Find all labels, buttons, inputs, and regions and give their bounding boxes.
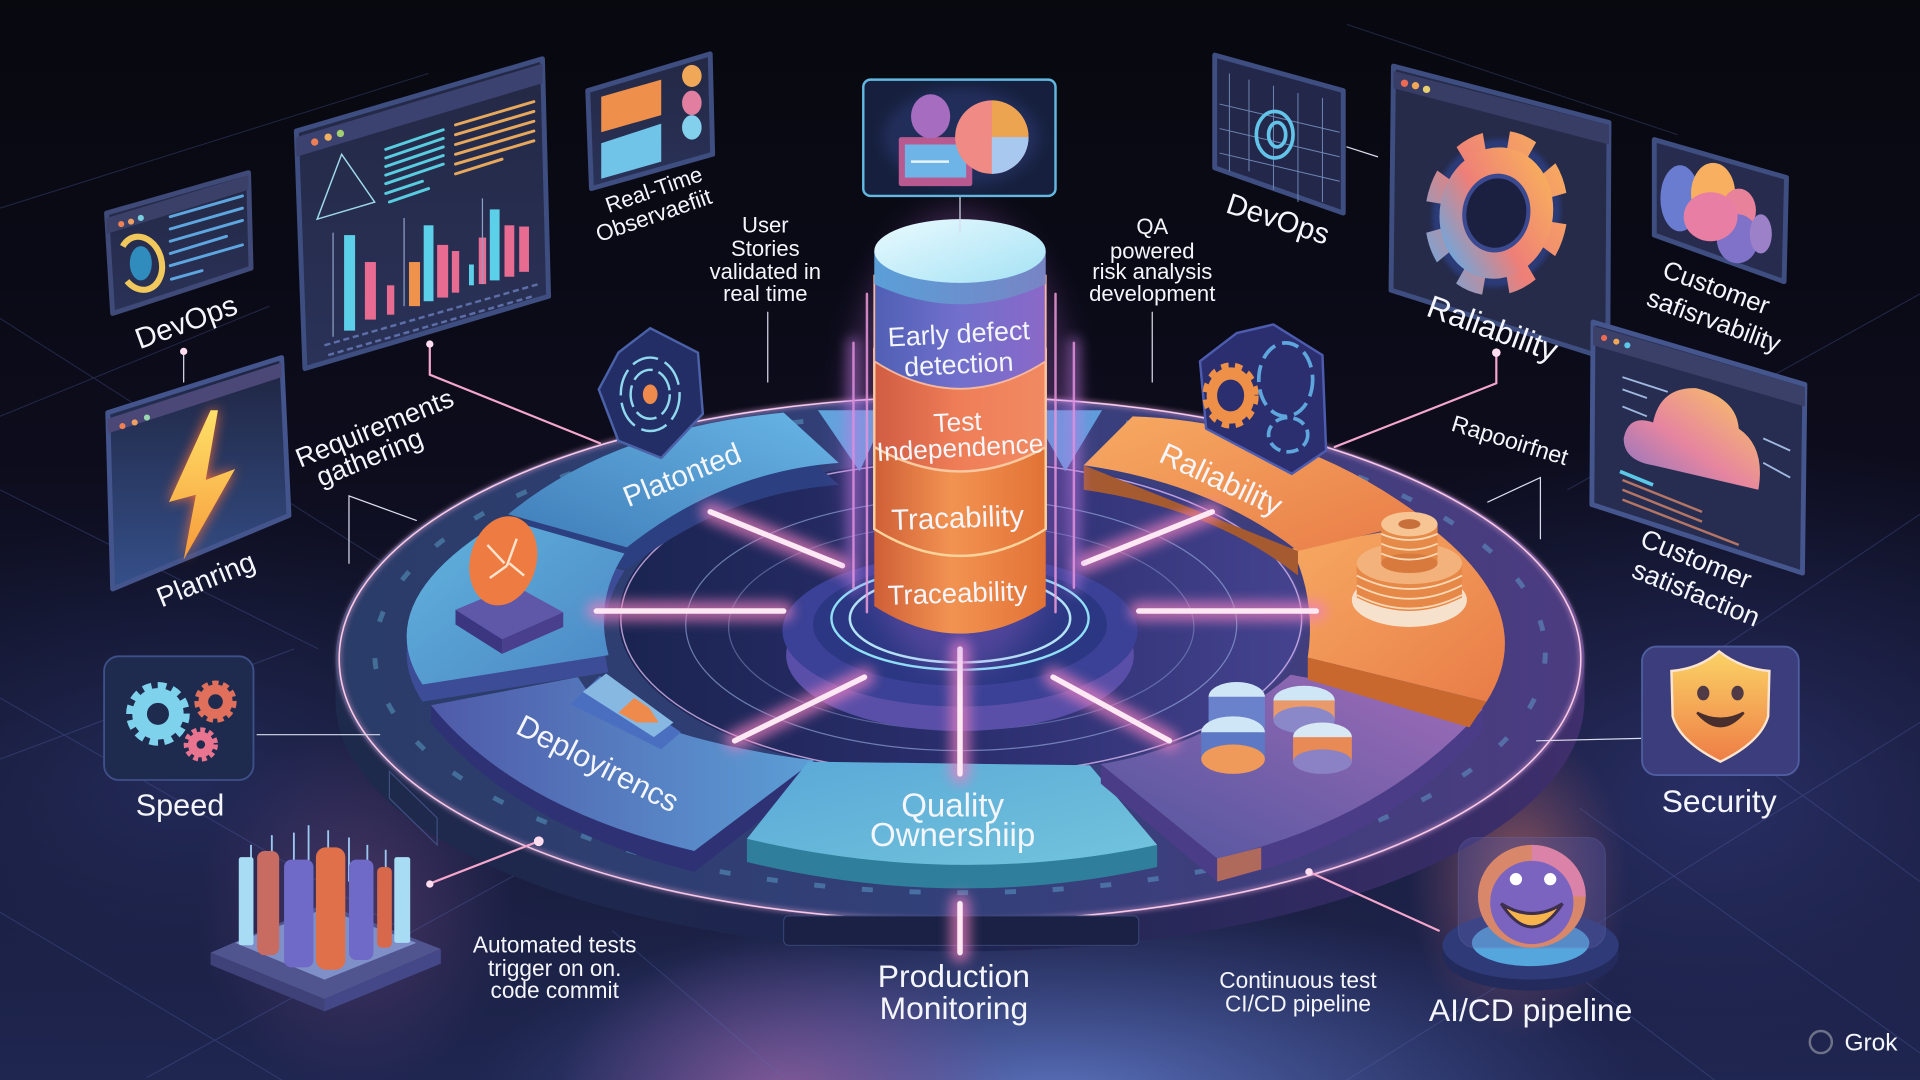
panel: Security shield — [1642, 647, 1799, 775]
segment: left blue with orange disc — [407, 508, 624, 702]
panel: main dashboard — [296, 59, 549, 369]
icon: large gear — [1421, 129, 1572, 297]
label: automated tests — [473, 932, 636, 1003]
icon: cloud — [1624, 388, 1760, 490]
segment: Deployirencs — [431, 673, 814, 872]
panel: hex orbit icon — [599, 328, 703, 458]
column section: Test Independence: Independence — [876, 428, 1044, 467]
connectors — [180, 147, 1641, 931]
column lid — [874, 219, 1046, 304]
label: QA powered risk analysis: powered — [1110, 238, 1195, 263]
icon: orange gear — [1206, 366, 1256, 425]
segment: Platonted — [508, 413, 839, 569]
column section: Early defect detection: Early defect — [887, 315, 1031, 353]
column section: Test Independence: Test — [933, 406, 983, 438]
label: Raliability panel: Raliability — [1422, 288, 1563, 368]
icon: triangle diagram — [317, 154, 375, 219]
label: continuous test — [1219, 967, 1377, 1016]
label: automated tests: Automated tests — [473, 932, 636, 958]
icon: lightning bolt — [169, 410, 235, 560]
panel: planning bolt — [108, 358, 289, 589]
label: Requirements gathering: gathering — [312, 423, 427, 492]
label: DevOps right: DevOps — [1222, 187, 1333, 251]
panel: DevOps left — [107, 173, 251, 313]
label: Production Monitoring: Production — [878, 958, 1030, 994]
label: continuous test: Continuous test — [1219, 967, 1377, 993]
icon: orange disc on pedestal — [456, 508, 563, 654]
label: Real-Time Observaefiit: Observaefiit — [592, 183, 716, 247]
label: Rapooirfnet: Rapooirfnet — [1449, 410, 1572, 470]
bar chart — [333, 198, 529, 337]
icon: donut chart — [114, 232, 168, 295]
column section: Traceability — [874, 514, 1046, 634]
panel: top center pie — [863, 80, 1056, 196]
label: DevOps left: DevOps — [131, 289, 242, 356]
column section: Early defect detection: detection — [903, 347, 1014, 382]
panel: hexagon gear — [1200, 324, 1326, 474]
panel: Speed gears — [104, 656, 253, 780]
segment: Raliability: Raliability — [1154, 437, 1288, 523]
panel: Reliability gear — [1391, 66, 1609, 359]
segment: Deployirencs: Deployirencs — [511, 709, 684, 819]
column section: Tracability: Tracability — [891, 499, 1025, 537]
label: Planring: Planring — [152, 546, 260, 613]
icon: spiral target — [1256, 111, 1293, 158]
light blue wedges beside column — [818, 410, 1102, 471]
icon: folder — [899, 94, 972, 186]
panel: AI smile device — [1442, 838, 1619, 991]
label: AI/CD pipeline: AI/CD pipeline — [1429, 992, 1632, 1028]
label: Customer safisrvability: safisrvability — [1643, 284, 1784, 358]
watermark: Grok: Grok — [1845, 1030, 1898, 1057]
light rays — [596, 294, 1316, 953]
panel: cloud dashboard — [1592, 322, 1805, 573]
label: QA powered risk analysis: QA — [1136, 214, 1168, 239]
icon: four drums — [1201, 682, 1352, 774]
label: Speed: Speed — [136, 789, 224, 823]
label: automated tests: code commit — [491, 977, 620, 1003]
label: user stories: real time — [723, 281, 808, 306]
segment: orange with tower — [1292, 524, 1505, 727]
panel: DevOps right — [1215, 55, 1343, 213]
icon: red gear — [197, 683, 234, 720]
label: QA powered risk analysis: development — [1089, 281, 1215, 306]
central column — [844, 208, 1076, 673]
icon: blue gear — [130, 686, 186, 742]
label: Security: Security — [1662, 783, 1777, 819]
icon: balloon cloud — [1660, 163, 1772, 263]
label: continuous test: CI/CD pipeline — [1225, 990, 1371, 1016]
label: Customer satisfaction: Customer — [1636, 523, 1756, 595]
icon: smiling face — [1478, 845, 1586, 948]
icon: shield smile — [1671, 651, 1769, 762]
central hub — [782, 555, 1138, 731]
column section: Early defect detection — [874, 276, 1046, 389]
icon: building stack — [211, 825, 441, 1011]
panel: Real-Time Observability — [588, 54, 713, 189]
label: Customer satisfaction: satisfaction — [1628, 554, 1764, 633]
segment: Quality Ownership: Quality — [901, 788, 1005, 825]
label: QA powered risk analysis: risk analysis — [1092, 259, 1212, 284]
label: automated tests: trigger on on. — [488, 955, 621, 981]
segment: Platonted: Platonted — [618, 437, 746, 514]
label: Customer safisrvability: Customer — [1659, 256, 1774, 321]
segment: Raliability — [1084, 416, 1427, 576]
platform base — [336, 396, 1584, 951]
label: Requirements gathering: Requirements — [291, 383, 458, 473]
label: user stories: validated in — [710, 259, 821, 284]
icon: pink gear — [186, 730, 216, 759]
watermark: Grok — [1810, 1030, 1898, 1057]
label: user stories — [710, 213, 821, 306]
column section: Tracability — [874, 441, 1046, 556]
segment: purple with drums — [1101, 675, 1483, 882]
label: user stories: Stories — [731, 236, 800, 261]
column section: Traceability: Traceability — [887, 575, 1028, 611]
icon: deployment block — [571, 673, 681, 749]
segment: Quality Ownership — [747, 762, 1157, 888]
label: Production Monitoring — [878, 958, 1030, 1026]
icon: stacked rings tower — [1352, 512, 1467, 627]
panel: Customer clouds — [1654, 140, 1787, 282]
segment: Quality Ownership: Ownershiip — [870, 817, 1035, 854]
label: user stories: User — [742, 213, 789, 238]
icon: pie chart — [955, 100, 1029, 174]
inner disc — [618, 459, 1304, 778]
label: Real-Time Observaefiit: Real-Time — [602, 161, 706, 218]
label: Production Monitoring: Monitoring — [880, 990, 1028, 1026]
label: QA powered risk analysis — [1089, 214, 1215, 306]
column section: Test Independence — [874, 349, 1046, 471]
